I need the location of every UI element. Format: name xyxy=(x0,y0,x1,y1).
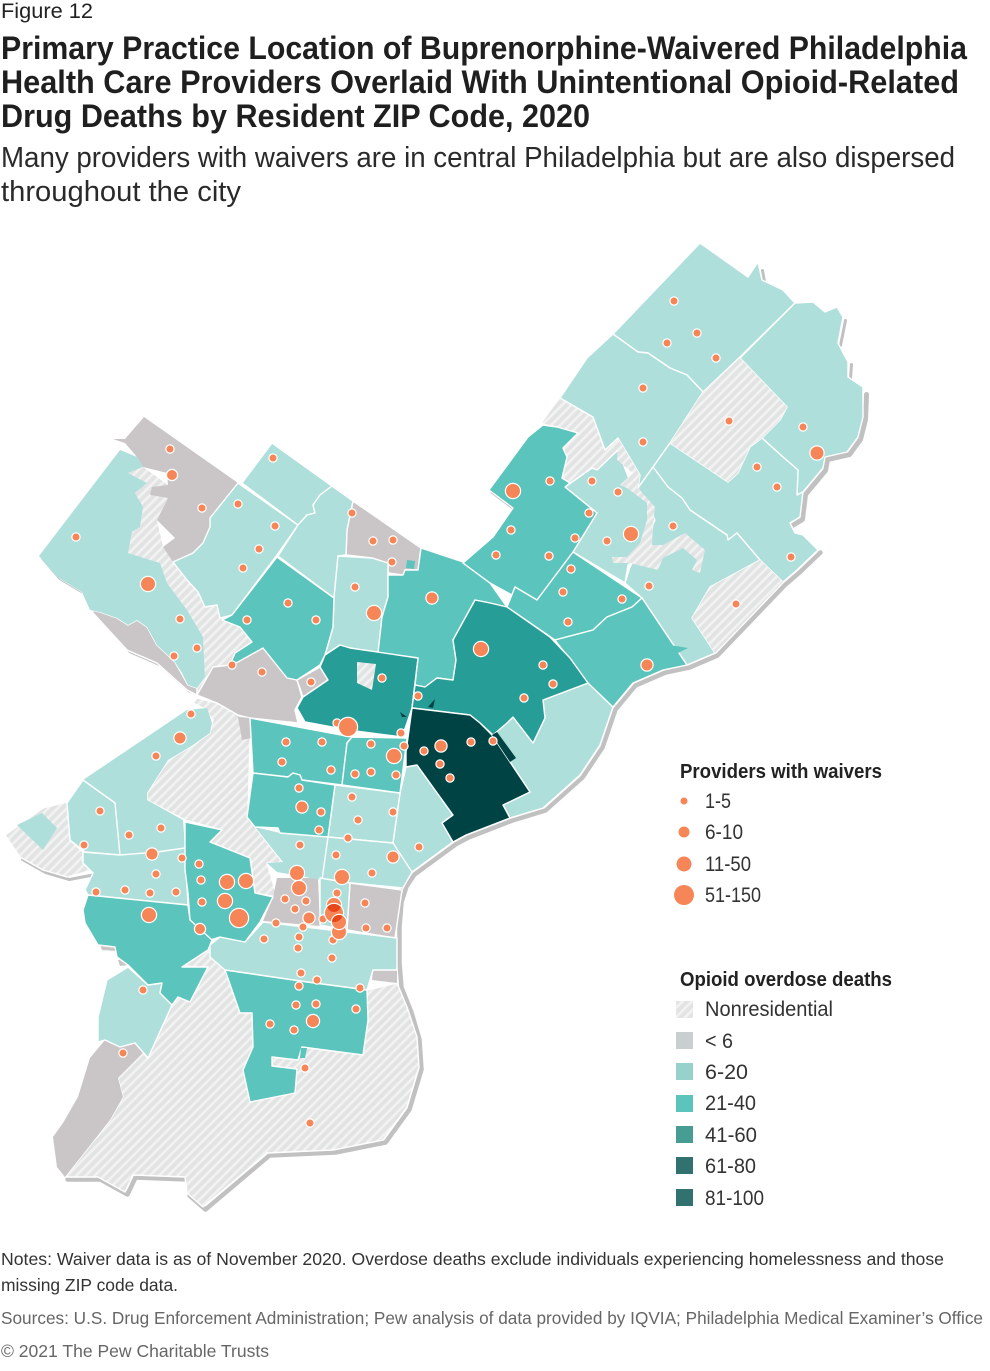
river nonresidential overlays xyxy=(612,358,787,653)
subtitle: throughout the city xyxy=(1,176,241,208)
legend: providers with waivers: 6-10 xyxy=(705,821,743,844)
deaths 61-100: darkest ZIP area xyxy=(400,699,530,842)
river bank shadow xyxy=(22,270,866,1210)
legend: providers with waivers: 51-150 xyxy=(705,884,761,907)
map: Philadelphia ZIP codes by opioid overdose deaths xyxy=(5,243,866,1210)
deaths under 6: grey ZIP areas xyxy=(53,417,421,1177)
legend: opioid overdose deaths: 61-80 xyxy=(705,1155,756,1178)
legend: opioid overdose deaths: 41-60 xyxy=(705,1124,757,1147)
legend: opioid overdose deaths: 21-40 xyxy=(705,1092,756,1115)
figure label: Figure 12 xyxy=(1,0,93,23)
legend: providers with waivers: 11-50 xyxy=(705,853,751,876)
copyright: © 2021 The Pew Charitable Trusts xyxy=(1,1341,269,1361)
notes xyxy=(1,1249,944,1295)
title xyxy=(1,30,967,134)
nonresidential areas xyxy=(5,398,705,1207)
legend: opioid overdose deaths xyxy=(676,969,892,1210)
legend: opioid overdose deaths: Nonresidential xyxy=(705,998,833,1021)
title: Health Care Providers Overlaid With Unintentional Opioid-Related xyxy=(1,64,959,100)
deaths 6-20: light teal ZIP areas xyxy=(17,243,863,1058)
sources: Sources: U.S. Drug Enforcement Administration; Pew analysis of data provided by IQVIA; Philadelphia Medical Examiner’s Office xyxy=(1,1308,983,1328)
legend: providers with waivers: 1-5 xyxy=(705,790,731,813)
overlapping circles: darker overlap xyxy=(327,904,342,922)
subtitle xyxy=(1,142,955,208)
title: Drug Deaths by Resident ZIP Code, 2020 xyxy=(1,98,590,134)
legend: opioid overdose deaths: < 6 xyxy=(705,1030,733,1053)
legend: opioid overdose deaths: 6-20 xyxy=(705,1061,748,1084)
notes: missing ZIP code data. xyxy=(1,1275,178,1295)
legend: providers with waivers xyxy=(674,761,882,907)
subtitle: Many providers with waivers are in central Philadelphia but are also dispersed xyxy=(1,142,955,174)
legend: opioid overdose deaths: Opioid overdose deaths xyxy=(680,969,892,991)
provider location circles xyxy=(72,298,824,1126)
deaths 41-60: dark teal ZIP areas xyxy=(297,600,588,743)
legend: opioid overdose deaths: 81-100 xyxy=(705,1187,764,1210)
notes: Notes: Waiver data is as of November 2020. Overdose deaths exclude individuals experiencing homelessness and those xyxy=(1,1249,944,1269)
legend: providers with waivers: Providers with waivers xyxy=(680,761,882,783)
deaths 21-40: mid teal ZIP areas xyxy=(83,425,688,1102)
